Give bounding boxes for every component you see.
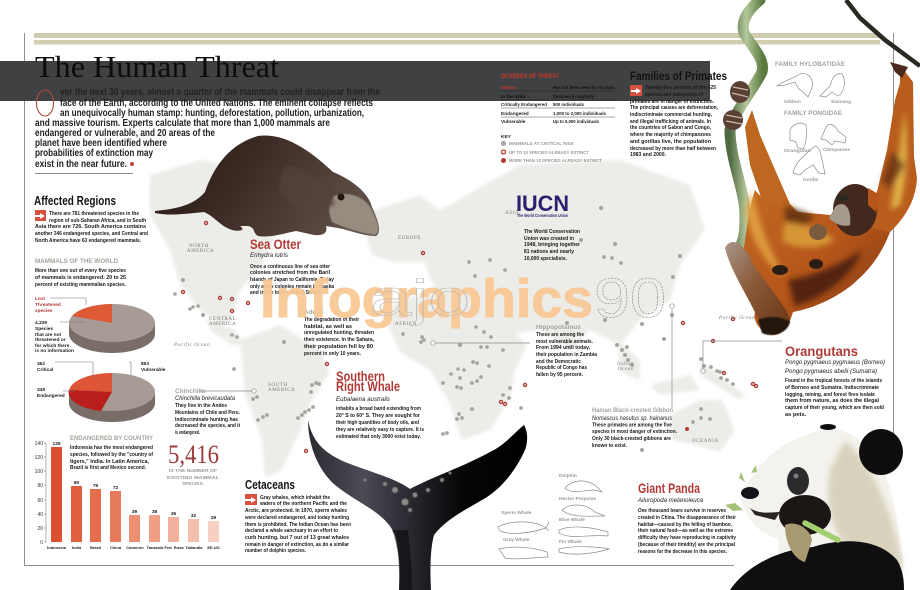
panel: families of primates: the countries of Gabon and Congo,: [630, 125, 711, 131]
infant: [809, 224, 827, 240]
pie chart: threatened species: [69, 304, 155, 353]
panel: southern right whale: [336, 368, 424, 440]
panel: sea otter: and in the lower United States.: [250, 290, 322, 296]
panel: cetaceans: declared a whale sanctuary in an effort to: [245, 528, 338, 534]
text: addax: percent in only 10 years.: [304, 351, 361, 357]
panel: affected regions: Asia there are 726. South America contains: [35, 224, 146, 230]
text: hainan gibbon: Nomascus nasutus sp. hainanus: [592, 415, 673, 422]
panel: giant panda: Ailuropoda melanoleuca: [637, 497, 703, 504]
pie labels: threatened: Species: [35, 326, 53, 332]
intro text: endangered or vulnerable, and 20 areas of the: [35, 128, 215, 139]
heading and text: ENDANGERED BY COUNTRY: [70, 435, 154, 442]
panel: families of primates: and illegal trafficking of animals. In: [630, 119, 711, 125]
pie labels: endangered: 893: [141, 361, 149, 367]
panel: orangutans: Found in the tropical forests of the islands: [785, 378, 882, 384]
bar values: 80: [74, 480, 79, 486]
pie labels: endangered: Vulnerable: [141, 367, 166, 373]
panel: giant panda: created in China. The disappearance of their: [638, 515, 737, 521]
primate family sketches: FAMILY HYLOBATIDAE: [775, 61, 846, 68]
axis: 80: [37, 483, 43, 489]
heading and text: species, followed by the "country of: [70, 452, 153, 458]
eye patch: [787, 467, 809, 495]
axis: 100: [35, 469, 43, 475]
panel: mammals of the world: of mammals is endangered: 20 to 25: [35, 275, 126, 281]
bar values: 38: [152, 509, 157, 515]
panel: giant panda: reasons for the decrease in this species.: [638, 549, 727, 555]
primate family sketches: Siamang: [831, 99, 851, 105]
panel: families of primates: where the majority of chimpanzees: [629, 132, 711, 138]
whale sketches: Blue Whale: [559, 517, 585, 523]
map labels: NORTH: [189, 244, 209, 249]
watermark: 90: [594, 266, 666, 329]
pie labels: endangered: 348: [37, 387, 45, 393]
panel: families of primates: [629, 69, 727, 158]
panel: affected regions: region of sub-Saharan Africa, and in South: [49, 218, 146, 224]
head: [833, 184, 877, 236]
bar values: 135: [52, 441, 61, 447]
bar values: 32: [191, 513, 196, 519]
text: chinchilla: is endangered.: [175, 430, 200, 436]
panel: cetaceans: were declared endangered, and today hunting: [244, 515, 349, 521]
panel: orangutans: as pets.: [785, 412, 807, 418]
logo: iucn: IUCN: [516, 191, 569, 216]
legend: key: MORE THAN 10 SPECIES ALREADY EXTINCT: [509, 158, 602, 164]
forearm: [725, 242, 790, 330]
pie labels: endangered: Endangered: [37, 393, 65, 399]
intro text: exist in the near future.: [35, 159, 127, 170]
text: addax: [304, 309, 374, 357]
panel: iucn: The World Conservation Union: [517, 213, 568, 218]
panel: orangutans: logging, mining, and forest fires isolate: [785, 392, 875, 398]
panel: southern right whale: Right Whale: [336, 378, 400, 394]
panel: cetaceans: Arctic, are protected. In 1970, sperm whales: [245, 508, 347, 514]
panel: iucn: 1948, bringing together: [524, 242, 581, 248]
map labels: Ocean: [618, 367, 634, 372]
pie labels: threatened: Lost: [35, 296, 46, 302]
panel: families of primates: species and subspecies of: [645, 92, 703, 98]
pie labels: threatened: [35, 296, 86, 354]
primate family sketches: Gibbon: [784, 99, 801, 105]
fur highlights: [745, 110, 907, 306]
panel: families of primates: and gorillas live, the population: [630, 139, 711, 145]
intro text: ver the next 30 years, almost a quarter of the mammals could disappear from the: [60, 87, 380, 98]
panel: southern right whale: they are relatively easy to capture. It is: [336, 427, 424, 433]
heading and text: [70, 435, 154, 471]
text: hainan gibbon: Hainan Black-crested Gibbon: [592, 407, 673, 414]
map labels: CENTRAL: [209, 317, 236, 322]
panel: orangutans: capture of their young, which are then sold: [785, 405, 884, 411]
heading: families of primates: Families of Primates: [630, 69, 727, 83]
panel: giant panda: difficulty they have reproducing in captivity: [638, 535, 737, 541]
illustration: orangutan: [723, 0, 920, 335]
pie labels: endangered: Critical: [37, 367, 53, 373]
whale sketches: [498, 473, 609, 559]
panel: sea otter: [250, 236, 335, 296]
panel: giant panda: [637, 480, 737, 555]
panel: orangutans: Pongo pygmaeus abelii (Sumatra): [785, 368, 877, 375]
panel: iucn: [516, 191, 581, 262]
intro text: probabilities of extinction may: [35, 148, 153, 159]
legend: key: KEY: [501, 134, 512, 140]
panel: southern right whale: 20° S to 60° S. They are sought for: [336, 413, 421, 419]
intro text: planet have been identified where: [35, 138, 167, 149]
panel: orangutans: of Borneo and Sumatra. Indiscriminate: [785, 385, 879, 391]
map labels: Indian: [616, 362, 634, 367]
text: hainan gibbon: species in most danger of extinction.: [592, 429, 677, 435]
panel: cetaceans: number of dolphin species.: [245, 548, 306, 554]
bar labels: Brasil: [90, 545, 101, 550]
axis: [35, 441, 46, 546]
table: degrees of threat: Critically Endangered: [501, 102, 547, 108]
map labels: Pacific Ocean: [718, 316, 755, 321]
text: chinchilla: They live in the Andes: [175, 403, 227, 409]
pie labels: threatened: threatened or: [35, 337, 66, 343]
primate family sketches: FAMILY PONGIDAE: [784, 110, 843, 117]
panel: affected regions: There are 781 threatened species in the: [49, 211, 139, 217]
top double stripe: [34, 33, 880, 44]
illustration: giant panda: [725, 424, 904, 590]
panel: sea otter: colonies stretched from the Baril: [250, 270, 330, 276]
map labels: EUROPE: [398, 236, 421, 241]
heading: affected regions: Affected Regions: [34, 194, 116, 208]
pie chart: endangered breakdown: [69, 373, 155, 422]
bar labels: Indonesia: [47, 545, 67, 550]
bar values: [52, 441, 216, 521]
text: chinchilla: [175, 388, 240, 436]
panel: cetaceans: waters of the northern Pacific and the: [259, 501, 347, 507]
text: chinchilla: Mountains of Chile and Peru.: [175, 410, 240, 416]
icon: arrow: [630, 85, 642, 96]
legend: key: UP TO 10 SPECIES ALREADY EXTINCT: [509, 150, 589, 156]
text: hippopotamus: These are among the: [536, 332, 584, 338]
text: hainan gibbon: known to exist.: [592, 443, 627, 449]
panel: affected regions: North America have 63 endangered mammals.: [35, 238, 141, 244]
watermark: ajo: [370, 270, 470, 326]
bar values: 29: [211, 515, 216, 521]
table: degrees of threat: Endangered: [501, 111, 529, 117]
map labels: AMERICA: [187, 249, 214, 254]
bar values: 75: [93, 483, 98, 489]
table: degrees of threat: Vulnerable: [501, 119, 526, 125]
watermark: Infographics: [260, 269, 593, 329]
text: hainan gibbon: [592, 407, 677, 449]
whale sketches: Fin Whale: [559, 539, 582, 545]
text: addax: habitat, as well as: [304, 324, 352, 330]
table: degrees of threat: [501, 85, 615, 125]
drop cap: [36, 90, 54, 116]
panel: families of primates: indiscriminate commercial hunting,: [630, 112, 712, 118]
title: The Human Threat: [35, 49, 279, 84]
panel: southern right whale: their high quantities of body oils, and: [336, 420, 419, 426]
text: hippopotamus: Republic of Congo has: [536, 365, 587, 371]
panel: giant panda: their natural food—as well as the extreme: [638, 528, 733, 534]
map labels: [173, 211, 755, 444]
text: hippopotamus: From 1994 until today,: [536, 345, 590, 351]
heading: giant panda: Giant Panda: [638, 480, 700, 496]
black body: [730, 541, 904, 590]
heading: mammals of the world: MAMMALS OF THE WORLD: [35, 258, 118, 265]
table: degrees of threat: Has not been seen for 70 years: [553, 85, 615, 91]
intro text: [35, 87, 380, 174]
text: hippopotamus: and the Democratic: [536, 359, 581, 365]
panel: sea otter: Islands of Japan to California. Today: [250, 277, 335, 283]
bamboo: [805, 523, 838, 540]
text: chinchilla: decreased the species, and it: [175, 423, 240, 429]
bar values: 39: [132, 509, 137, 515]
text: addax: The degradation of their: [304, 317, 360, 323]
pie labels: threatened: Threatened: [35, 302, 61, 308]
primate family sketches: Gorilla: [803, 177, 819, 183]
primate family sketches: [775, 61, 851, 183]
axis: 60: [37, 498, 43, 504]
ears: [820, 424, 903, 475]
panel: giant panda: One thousand bears survive in reserves: [638, 508, 726, 514]
panel: mammals of the world: percent of existing mammalian species.: [35, 282, 126, 288]
table: degrees of threat: 1,000 to 2,000 individuals: [553, 111, 606, 117]
text: chinchilla: Indiscriminate hunting has: [175, 417, 238, 423]
table: degrees of threat: Up to 5,000 individuals: [553, 119, 599, 125]
pie labels: endangered: [37, 361, 166, 399]
heading and text: Brazil is first and Mexico second.: [70, 465, 146, 471]
legend: key: MAMMALS AT CRITICAL RISK: [509, 141, 574, 147]
panel: sea otter: Once a continuous line of sea otter: [250, 264, 331, 270]
hands: [723, 81, 750, 130]
axis: 120: [35, 455, 43, 461]
text: chinchilla: Chinchilla brevicaudata: [175, 395, 235, 402]
dark band: [0, 61, 710, 101]
text: addax: their existence. In the Sahara,: [304, 337, 374, 343]
heading and text: tigers," India. In Latin America,: [70, 459, 149, 465]
bar labels: Tailandia: [185, 545, 203, 550]
panel: orangutans: Pongo pygmaeus pygmaeus (Borneo): [785, 359, 885, 366]
bar labels: India: [72, 545, 82, 550]
map labels: ASIA: [505, 211, 519, 216]
panel: orangutans: [785, 343, 885, 418]
panel: families of primates: decreased by more than half between: [630, 146, 716, 152]
text: addax: their population fell by 80: [304, 344, 373, 350]
paw: [779, 495, 831, 535]
whale sketches: Hector Porpoise: [559, 496, 596, 502]
text: addax: Addax: [304, 309, 324, 316]
text: addax: unregulated hunting, threaten: [304, 330, 374, 336]
panel: sea otter: Enhydra lutris: [250, 252, 289, 259]
heading: sea otter: Sea Otter: [250, 236, 301, 252]
axis: 0: [40, 540, 43, 546]
panel: mammals of the world: [35, 258, 166, 422]
bar labels: Tanzania: [147, 545, 164, 550]
panel: affected regions: [34, 194, 148, 244]
intro text: an unequivocally human stamp: hunting, deforestation, pollution, urbanization,: [60, 108, 364, 119]
pie labels: threatened: that are not: [35, 332, 62, 338]
panel: iucn: The World Conservation: [524, 229, 580, 235]
illustration: whale tail: [308, 420, 527, 590]
heading: southern right whale: Southern: [336, 368, 385, 384]
panel: southern right whale: estimated that only 3000 exist today.: [336, 434, 421, 440]
panel: sea otter: only a few colonies remain in Alaska: [250, 284, 335, 290]
axis: 40: [37, 512, 43, 518]
axis: 140: [35, 441, 43, 447]
intro text: face of the Earth, according to the United Nations. The eminent collapse reflects: [60, 98, 373, 109]
map labels: AFRICA: [395, 322, 417, 327]
icon: arrow: [245, 494, 257, 505]
map labels: AMERICA: [268, 388, 295, 393]
map labels: AMERICA: [209, 322, 236, 327]
panel: iucn: 81 nations and nearly: [524, 249, 575, 255]
whale sketches: Dolphin: [559, 473, 577, 479]
primate family sketches: Orangutan: [784, 148, 811, 154]
table: degrees of threat: Survives in captivity: [553, 94, 594, 100]
panel: iucn: 10,000 specialists.: [524, 256, 567, 262]
stat: 5,416: 5,416: [168, 440, 219, 469]
panel: families of primates: Twenty-five percent of the 625: [645, 85, 716, 91]
whale sketches: Gray Whale: [503, 537, 530, 543]
pie labels: threatened: is no information: [35, 348, 74, 354]
bar labels: Camerún: [126, 545, 144, 550]
pie labels: threatened: species: [35, 308, 53, 314]
panel: orangutans: them from nature, as does the illegal: [785, 398, 879, 404]
bar labels: EE.UU.: [207, 545, 221, 550]
panel: giant panda: habitat—caused by the felling of bamboo,: [638, 522, 732, 528]
bars: [51, 447, 219, 542]
panel: affected regions: another 346 endangered species, and Central and: [35, 231, 148, 237]
bar labels: Fed. Rusa: [164, 545, 184, 550]
icon: arrow: [35, 210, 46, 221]
axis: 20: [37, 526, 43, 532]
torso: [743, 190, 890, 335]
panel: families of primates: primates are in danger of extinction.: [630, 99, 714, 105]
arm: left arm: [745, 110, 800, 232]
stat: 5,416: [167, 440, 219, 487]
table: degrees of threat: In the Wild: [501, 94, 525, 100]
panel: mammals of the world: More than one out of every five species: [35, 268, 126, 274]
bar values: 35: [171, 511, 176, 517]
leader lines: [199, 304, 782, 408]
nose: [741, 487, 759, 499]
text: hainan gibbon: Only 30 black-crested gibbons are: [592, 436, 671, 442]
bar labels: [47, 545, 221, 550]
heading: cetaceans: Cetaceans: [245, 478, 295, 492]
table: degrees of threat: Extinct: [501, 85, 517, 91]
whale sketches: Sperm Whale: [501, 510, 532, 516]
panel: southern right whale: Eubalaena australis: [336, 396, 391, 403]
map labels: SOUTH: [268, 383, 288, 388]
panel: cetaceans: remain in danger of extinction, as do a similar: [245, 542, 350, 548]
panel: cetaceans: Gray whales, which inhabit the: [260, 495, 330, 501]
stat: 5,416: EXISTING MAMMAL: [167, 475, 219, 481]
text: hippopotamus: Hippopotamus: [536, 324, 581, 331]
stat: 5,416: IS THE NUMBER OF: [169, 468, 217, 474]
intro text: and massive tourism. Experts calculate that more than 1,000 mammals are: [35, 118, 330, 129]
text: hippopotamus: fallen by 95 percent.: [536, 372, 583, 378]
panel: southern right whale: inhabits a broad band extending from: [336, 406, 421, 412]
bar labels: China: [110, 545, 122, 550]
text: hippopotamus: most vulnerable animals.: [536, 339, 593, 345]
map dots: [173, 206, 758, 453]
stat: 5,416: SPECIES.: [182, 481, 204, 487]
legend: key: [501, 134, 602, 164]
illustration: sea otter: [155, 135, 379, 236]
heading and text: Indonesia has the most endangered: [70, 445, 153, 451]
panel: cetaceans: [244, 478, 351, 554]
heading: degrees of threat: DEGREES OF THREAT: [501, 73, 559, 80]
heading: orangutans: Orangutans: [785, 343, 858, 359]
panel: families of primates: The principal causes are deforestation,: [630, 105, 718, 111]
map labels: OCEANIA: [692, 439, 719, 444]
panel: cetaceans: curb hunting, but 7 out of 13 great whales: [245, 535, 349, 541]
bar chart: endangered by country: [35, 435, 221, 550]
arm: raised right arm: [860, 65, 917, 232]
panel: giant panda: (because of their timidity) are the principal: [638, 542, 735, 548]
head and chest: [740, 430, 903, 590]
pie labels: threatened: 4,339: [35, 320, 47, 326]
world map: [150, 160, 745, 478]
panel: families of primates: 1983 and 2000.: [630, 152, 666, 158]
map labels: Pacific Ocean: [173, 343, 210, 348]
text: chinchilla: Chinchilla: [175, 388, 206, 395]
pie labels: endangered: 362: [37, 361, 45, 367]
panel: cetaceans: them is prohibited. The Indian Ocean has been: [245, 522, 351, 528]
pie labels: threatened: for which there: [35, 343, 70, 349]
panel: iucn: Union was created in: [524, 236, 574, 242]
vine: [730, 0, 763, 250]
text: hippopotamus: [536, 324, 598, 378]
text: hippopotamus: their population in Zambia: [536, 352, 598, 358]
table: degrees of threat: 500 individuals: [553, 102, 584, 108]
text: hainan gibbon: These primates are among the five: [592, 422, 672, 428]
bar values: 72: [113, 485, 118, 491]
branch: [846, 0, 920, 66]
primate family sketches: Chimpanzee: [823, 147, 850, 153]
